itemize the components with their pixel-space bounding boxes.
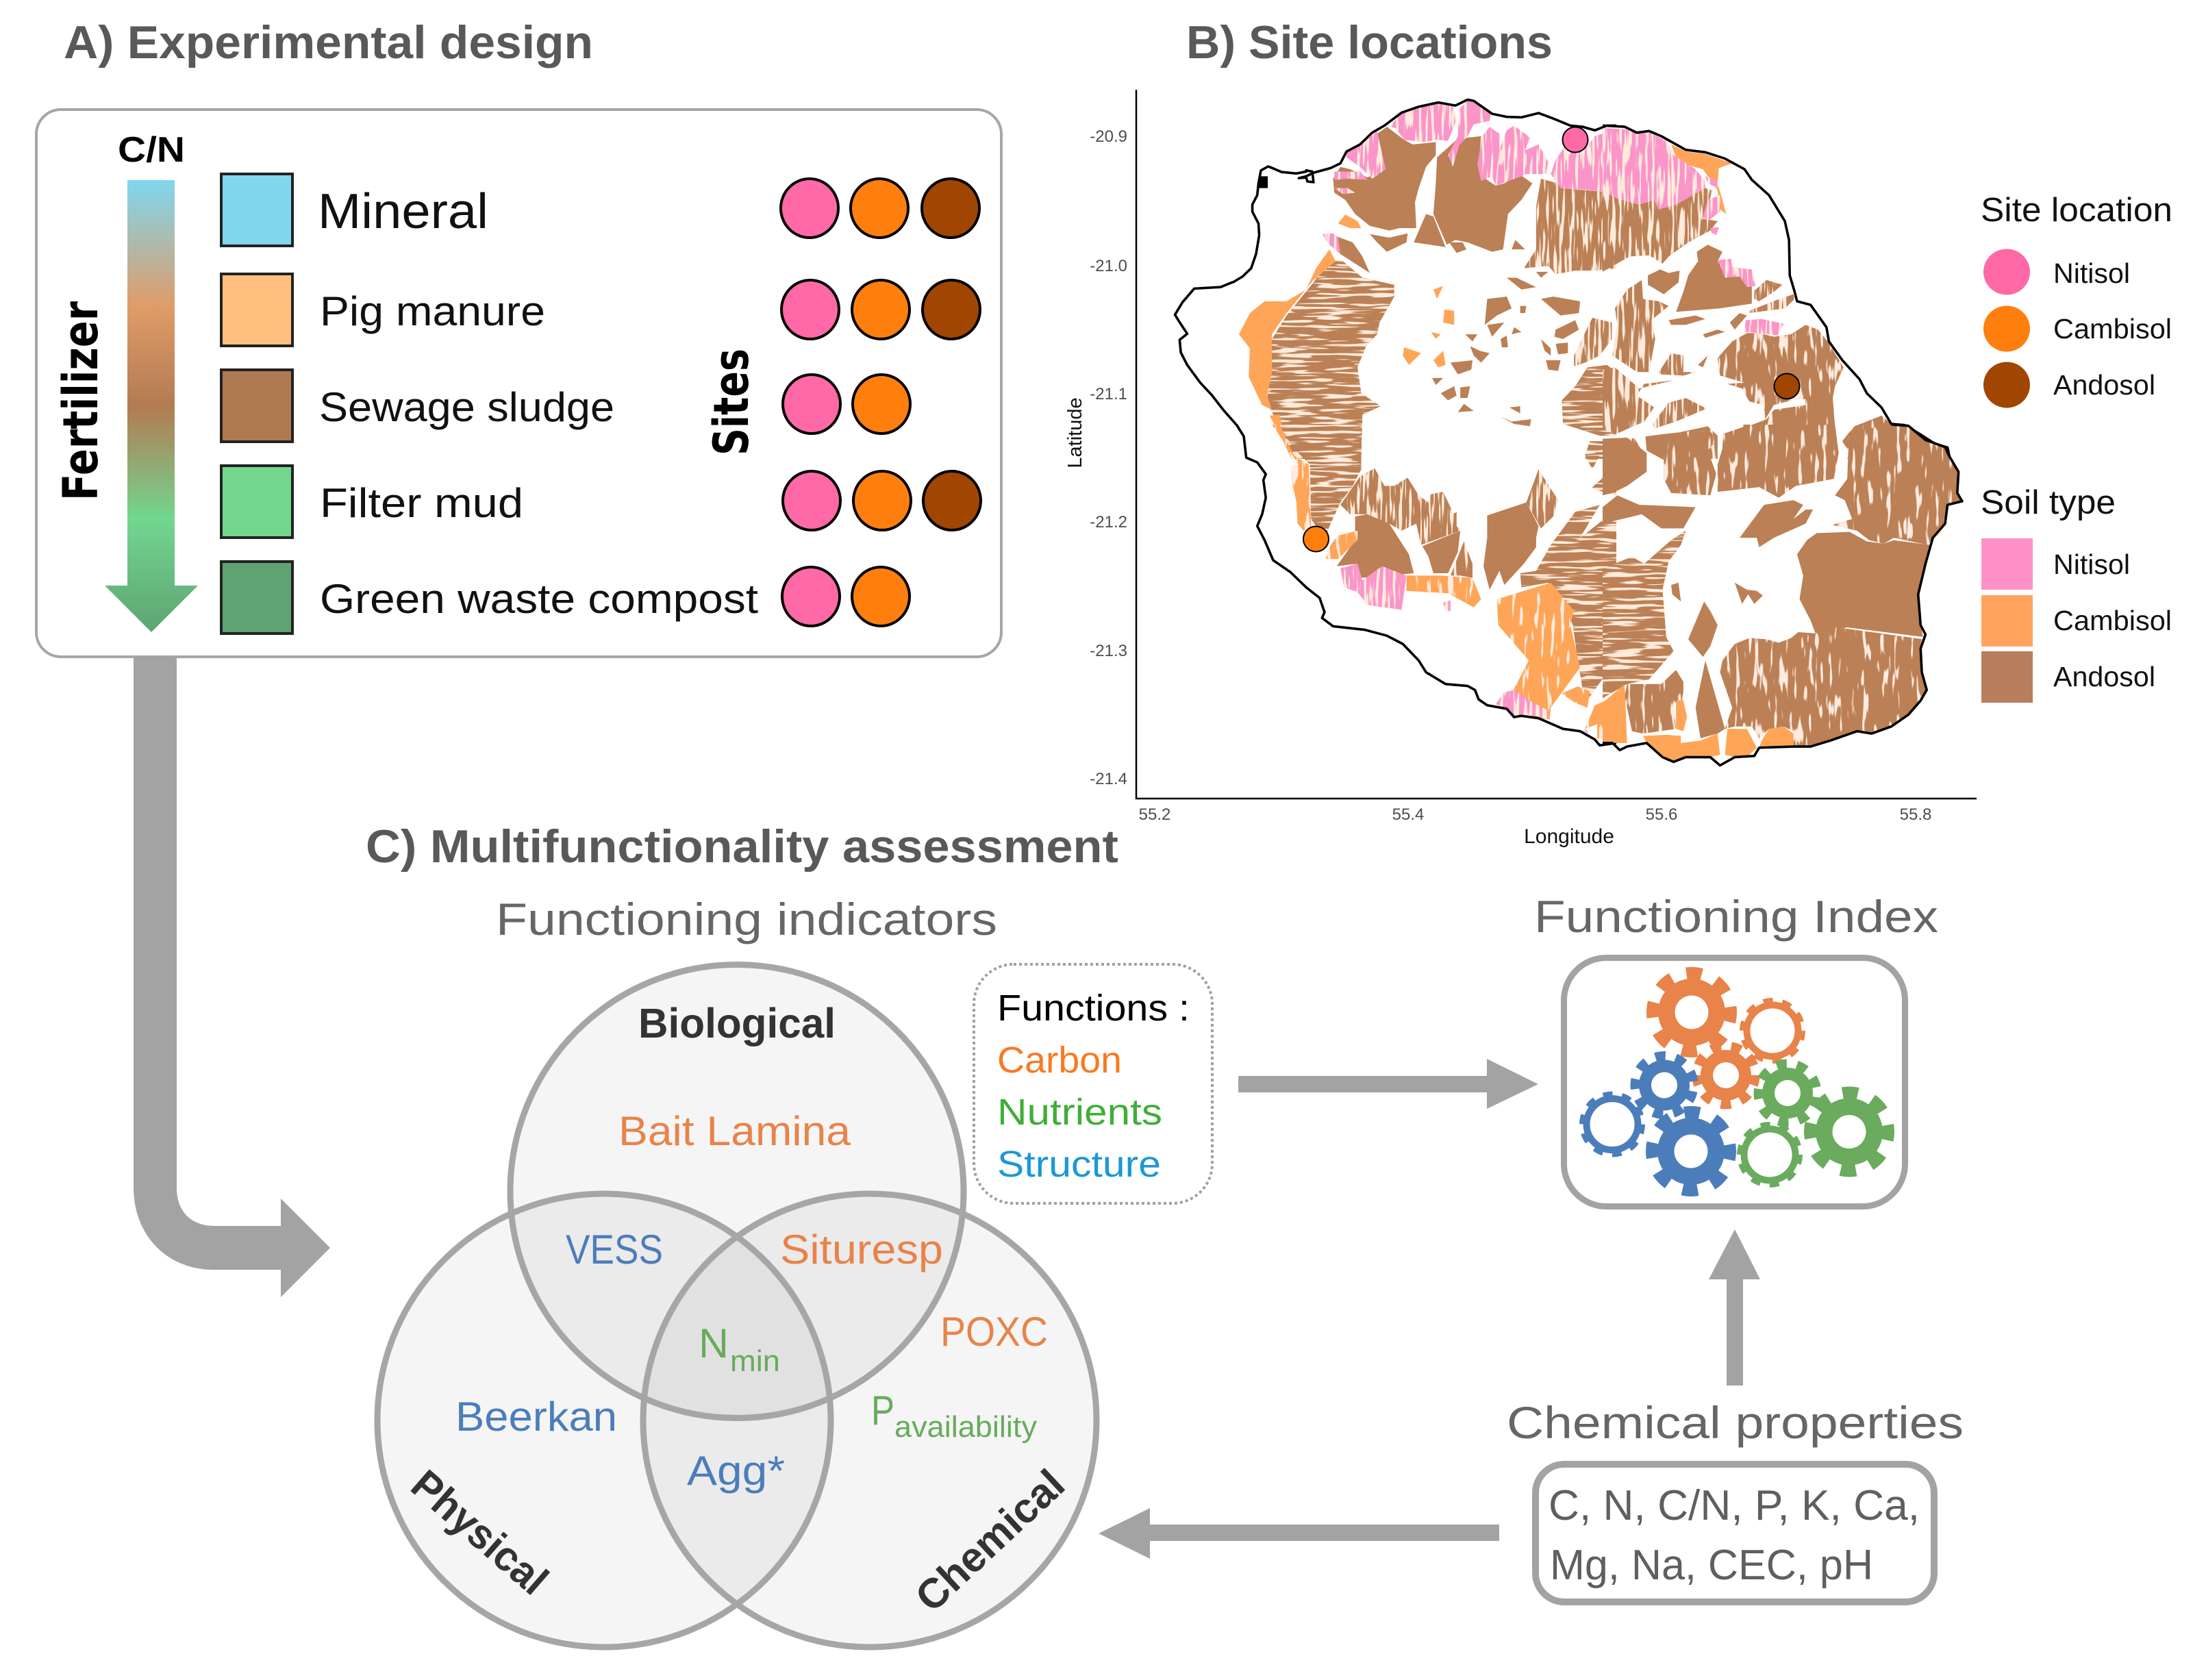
gear: orange ring: [1742, 1000, 1803, 1062]
legend: site location: Cambisol: [2053, 313, 2172, 344]
map: north-west soils: [1233, 99, 1616, 459]
panel: chemical properties list: [1536, 1464, 1934, 1602]
fertilizer row: Mineral: [221, 174, 979, 246]
title: C) Multifunctionality assessment: C) Multifunctionality assessment: [366, 820, 1118, 873]
arrow: design to assessment: [134, 656, 330, 1297]
fertilizer row: Pig manure: [221, 274, 980, 346]
cambisol north-east: [1671, 145, 1732, 214]
venn: physical circle: [377, 1194, 831, 1647]
site marker: Nitisol: [1563, 127, 1588, 152]
venn: biological circle: [510, 964, 964, 1418]
nitisol south-west: [1340, 564, 1589, 734]
title: B) Site locations: B) Site locations: [1186, 16, 1553, 68]
legend: soil type: Andosol: [2053, 661, 2155, 692]
black coast fragment: [1258, 176, 1268, 188]
andosol streaked north-west: [1267, 259, 1616, 459]
andosol solid north-west: [1333, 127, 1580, 426]
coastline west: [1175, 282, 1236, 425]
legend: site location: [1981, 192, 2172, 408]
arrow: C/N gradient: [105, 180, 198, 632]
heading: Functioning indicators: Functioning indicators: [496, 894, 997, 944]
label: C/N: C/N: [118, 130, 185, 170]
map: south-east soils: [1603, 425, 1962, 766]
indicator: Nmin: N: [699, 1320, 729, 1366]
andosol south-east streaked: [1603, 531, 1686, 698]
panel: functioning index gears: [1564, 957, 1905, 1207]
fertilizer row: Filter mud: [221, 466, 981, 538]
nitisol north-east: [1603, 128, 1783, 336]
axis tick labels: [1090, 127, 1931, 824]
label: Chemical: Chemical: [906, 1460, 1073, 1620]
callout: functions: Structure: [997, 1144, 1161, 1185]
andosol streaked north: [1524, 179, 1616, 366]
andosol south-west streaked: [1279, 425, 1616, 703]
gear: blue large: [1646, 1107, 1735, 1196]
map: south-west soils: [1236, 425, 1616, 745]
andosol south-west solid: [1337, 503, 1538, 590]
coastline north-east: [1603, 125, 1950, 459]
venn outlines: [377, 964, 1096, 1647]
fertilizer row: Green waste compost: Green waste compost: [320, 576, 758, 622]
gear: blue medium: [1630, 1051, 1699, 1120]
site marker: Andosol: [1774, 374, 1800, 399]
gear: blue ring: [1581, 1094, 1643, 1155]
arrow: functions to index: [1238, 1059, 1538, 1109]
axis tick labels: -21.2: [1090, 513, 1127, 531]
legend: site location: Nitisol: [2053, 258, 2130, 289]
panel: chemical properties list: C, N, C/N, P, K, Ca,: [1549, 1482, 1920, 1529]
legend: soil type: Cambisol: [2053, 605, 2172, 636]
cambisol south-east: [1603, 684, 1794, 762]
heading: Functioning Index: Functioning Index: [1534, 891, 1938, 942]
map: north-east soils: [1603, 125, 1950, 459]
venn diagram: [377, 964, 1096, 1647]
axis tick labels: -20.9: [1090, 127, 1127, 146]
label: Biological: Biological: [638, 1000, 836, 1046]
gear: green medium: [1755, 1060, 1820, 1126]
indicator: Nmin: [699, 1320, 780, 1378]
axis tick labels: -21.3: [1090, 642, 1127, 660]
indicator: Bait Lamina: Bait Lamina: [618, 1108, 851, 1154]
panel: site locations map: [1064, 90, 1977, 848]
axis tick labels: 55.6: [1646, 805, 1677, 824]
legend: soil type: [1981, 484, 2172, 703]
map axes: [1136, 90, 1977, 799]
axis label: Latitude: Latitude: [1064, 397, 1086, 468]
gear: green large: [1805, 1088, 1894, 1176]
callout: functions: Nutrients: [997, 1092, 1162, 1133]
axis label: Longitude: Longitude: [1524, 825, 1614, 848]
indicator: VESS: VESS: [566, 1227, 663, 1272]
fertilizer row: Green waste compost: [221, 562, 910, 634]
andosol south-west vertical streaks: [1340, 468, 1558, 578]
fertilizer row: Sewage sludge: Sewage sludge: [319, 384, 614, 430]
axis tick labels: -21.4: [1090, 770, 1127, 788]
arrow: chemical properties to venn: [1099, 1508, 1499, 1559]
panel: chemical properties list: Mg, Na, CEC, pH: [1550, 1542, 1873, 1589]
indicator: Pavailability: [871, 1388, 1037, 1444]
legend: soil type: Soil type: [1981, 484, 2116, 521]
arrow: chemical properties to index: [1709, 1229, 1760, 1386]
coastline south-west: [1236, 425, 1616, 745]
cambisol south-west: [1272, 425, 1616, 740]
andosol south-east solid: [1603, 434, 1931, 738]
gear: orange medium: [1697, 1046, 1755, 1104]
coastline north-west: [1233, 99, 1616, 282]
fertilizer row: Mineral: Mineral: [318, 184, 488, 239]
legend: site location: Site location: [1981, 192, 2172, 229]
label: Physical: Physical: [403, 1461, 557, 1604]
axis tick labels: -21.0: [1090, 257, 1127, 275]
andosol north-east light streaks: [1644, 325, 1948, 459]
andosol south-east light streaks: [1625, 425, 1962, 747]
andosol north-east solid: [1648, 245, 1752, 367]
legend: site location: Andosol: [2053, 369, 2155, 401]
label: Fertilizer: Fertilizer: [53, 301, 109, 501]
indicator: Pavailability: availability: [894, 1410, 1037, 1444]
legend: soil type: Nitisol: [2053, 549, 2130, 580]
indicator: POXC: POXC: [940, 1309, 1048, 1355]
fertilizer row: Filter mud: Filter mud: [320, 480, 523, 526]
site marker: Cambisol: [1303, 526, 1329, 552]
panel: experimental design: [36, 110, 1001, 657]
axis tick labels: -21.1: [1090, 385, 1127, 403]
indicator: Pavailability: P: [871, 1388, 894, 1433]
fertilizer row: Sewage sludge: [221, 370, 910, 442]
indicator: Situresp: Situresp: [780, 1227, 943, 1272]
heading: Chemical properties: Chemical properties: [1507, 1397, 1964, 1448]
coastline south-east: [1603, 425, 1962, 766]
indicator: Nmin: min: [730, 1344, 780, 1378]
gear: green ring: [1739, 1124, 1801, 1186]
callout: functions: Functions :: [997, 988, 1190, 1029]
cambisol north-west: [1239, 214, 1454, 459]
label: Sites: Sites: [703, 349, 760, 455]
gear: orange large: [1649, 969, 1735, 1055]
fertilizer row: Pig manure: Pig manure: [320, 288, 545, 334]
venn: chemical circle: [643, 1194, 1096, 1647]
axis tick labels: 55.2: [1139, 805, 1170, 824]
title: A) Experimental design: A) Experimental design: [64, 16, 593, 68]
indicator: Agg*: Agg*: [687, 1448, 785, 1494]
nitisol north-west: [1322, 101, 1616, 254]
callout: functions: Carbon: [997, 1040, 1122, 1081]
axis tick labels: 55.8: [1900, 805, 1931, 824]
andosol north-east streaked: [1603, 188, 1794, 459]
indicator: Beerkan: Beerkan: [455, 1394, 617, 1440]
axis tick labels: 55.4: [1392, 805, 1424, 824]
callout: functions: [974, 964, 1212, 1203]
